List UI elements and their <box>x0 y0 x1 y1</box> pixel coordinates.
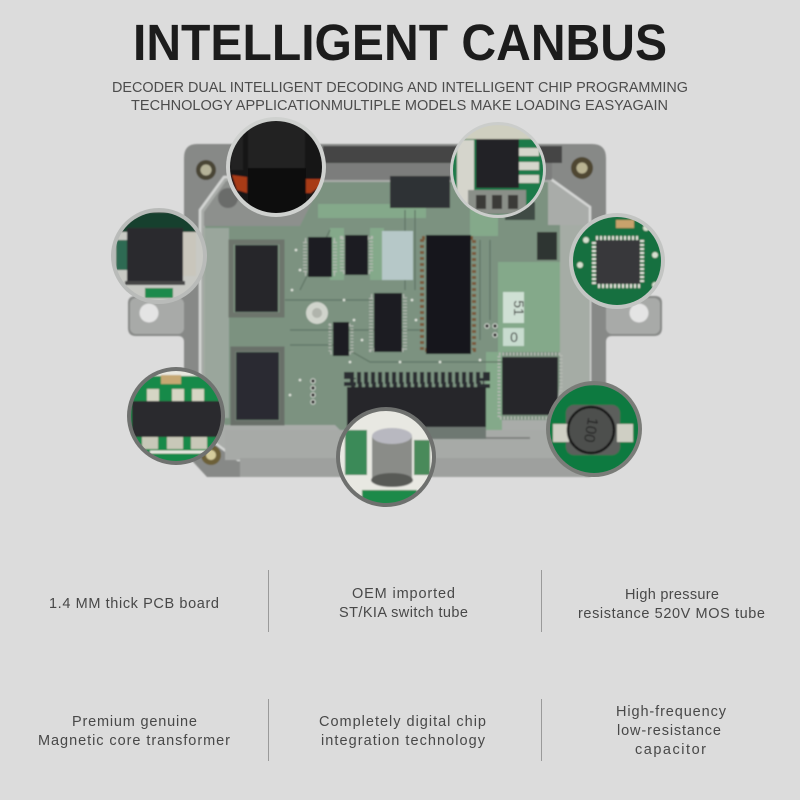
lower metal strip <box>225 430 585 460</box>
feature: digital chip: integration technology <box>321 733 486 749</box>
standoff upper left <box>218 188 238 208</box>
divider <box>540 699 542 761</box>
QFP chip upper left <box>231 242 282 315</box>
callout: QFN chip right <box>569 213 665 309</box>
callout: MOS tube left <box>110 208 210 305</box>
feature: transformer: Magnetic core transformer <box>38 733 230 749</box>
divider <box>540 570 542 632</box>
feature: digital chip <box>319 714 486 749</box>
central long chip <box>422 235 474 354</box>
screw standoff <box>306 302 328 324</box>
white label 51: 0 <box>510 329 518 345</box>
feature: transformer <box>38 714 230 749</box>
callout: capacitor bottom center <box>336 407 436 507</box>
upper left metal area <box>204 181 320 226</box>
feature: MOS tube: High pressure <box>625 587 719 603</box>
feature: capacitor: High-frequency <box>616 704 727 720</box>
feature: digital chip: Completely digital chip <box>319 714 486 730</box>
callout: driver chip left bottom <box>127 367 225 465</box>
title: INTELLIGENT CANBUS <box>133 14 667 71</box>
divider <box>268 570 270 632</box>
top connector chip <box>390 176 450 208</box>
feature: OEM switch tube <box>339 586 468 621</box>
subtitle <box>112 80 688 114</box>
white label 51 <box>503 292 527 346</box>
right small chips <box>505 202 557 260</box>
circuit board module <box>128 144 662 477</box>
feature: capacitor: low-resistance <box>617 723 721 739</box>
QFP chip right <box>499 354 561 418</box>
silver label <box>382 231 413 280</box>
callout: inductor bottom right: 100 <box>580 416 601 444</box>
small chips top <box>305 235 371 277</box>
dark upper housing band <box>323 146 562 163</box>
feature: capacitor: capacitor <box>635 742 706 758</box>
subtitle: TECHNOLOGY APPLICATIONMULTIPLE MODELS MAKE LOADING EASYAGAIN <box>131 98 668 114</box>
pin header holes <box>311 324 497 404</box>
feature: OEM switch tube: OEM imported <box>352 586 455 602</box>
mounting ears <box>130 298 660 334</box>
screw top right <box>571 157 593 179</box>
feature: MOS tube <box>578 587 765 622</box>
callout: transformer <box>226 117 326 217</box>
subtitle: DECODER DUAL INTELLIGENT DECODING AND INTELLIGENT CHIP PROGRAMMING <box>112 80 688 96</box>
callout: inductor bottom right <box>546 381 642 477</box>
small chip center <box>330 322 352 356</box>
callout: switch tube top right <box>450 122 546 218</box>
feature: capacitor <box>616 704 727 758</box>
feature: MOS tube: resistance 520V MOS tube <box>578 606 765 622</box>
traces <box>285 210 505 362</box>
screw bottom left <box>201 445 221 465</box>
translucent metal overlay right <box>560 225 590 435</box>
divider <box>268 699 270 761</box>
light green copper areas <box>318 204 560 430</box>
bottom long chip with pins <box>347 378 486 439</box>
white label 51: 51 <box>511 300 527 316</box>
feature: OEM switch tube: ST/KIA switch tube <box>339 605 468 621</box>
mounting holes <box>140 304 648 322</box>
mid chip <box>371 293 405 352</box>
metal housing plate <box>128 144 662 477</box>
screw top left <box>196 160 216 180</box>
QFP chip lower left <box>233 349 282 423</box>
green PCB <box>205 182 565 435</box>
feature: transformer: Premium genuine <box>72 714 197 730</box>
inner metal frame <box>200 177 590 460</box>
feature: 1.4 MM PCB: 1.4 MM thick PCB board <box>49 596 219 612</box>
